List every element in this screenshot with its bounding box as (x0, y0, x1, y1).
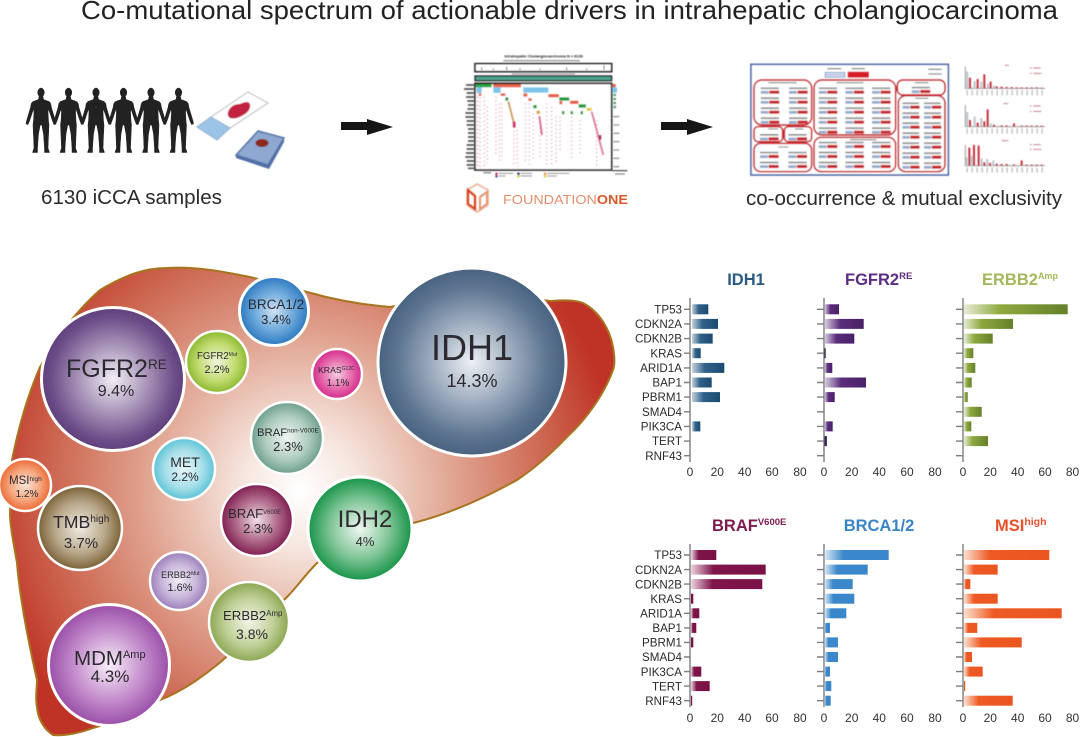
icon: row of people (26, 88, 194, 152)
bubble: MET (153, 438, 215, 500)
gene labels: PIK3CA (641, 666, 682, 679)
bubble: TMB high: 3.7% (64, 535, 98, 552)
tick labels: 40 (1011, 465, 1025, 479)
axis (956, 544, 963, 707)
arrow: sequencing to analysis (661, 119, 713, 135)
bubble: ERBB2 Amp: ERBB2 (223, 608, 266, 623)
mini chart 1 (965, 65, 1045, 93)
bubble: MSI high: MSI (9, 475, 29, 487)
gene labels: SMAD4 (642, 651, 683, 664)
oncoprint matrix (464, 83, 627, 177)
mini chart 3 (965, 141, 1045, 170)
bubble: ERBB2 Amp: 3.8% (236, 626, 268, 642)
bubble: KRAS (312, 349, 362, 399)
chart title: IDH1 (727, 271, 765, 289)
chart: BRCA1/2 co-mutations (817, 517, 942, 725)
bars (824, 304, 866, 446)
bubble: BRCA1/2: BRCA1/2 (248, 297, 304, 312)
axis (684, 298, 690, 462)
tick labels: 0 (821, 465, 828, 479)
tick labels: 20 (711, 711, 724, 725)
tick labels (821, 711, 942, 725)
bubble: MET: MET (170, 454, 200, 470)
bubble: IDH2: 4% (356, 534, 375, 549)
label: samples: 6130 iCCA samples (41, 187, 222, 209)
bubble: FGFR2 RE: RE (148, 357, 167, 372)
gene labels: KRAS (650, 593, 682, 606)
gene labels: TERT (652, 435, 682, 448)
chart: ERBB2 Amp co-mutations (956, 271, 1079, 479)
panel: mini bar charts (965, 65, 1045, 170)
panel: co-occurrence matrix (751, 64, 948, 175)
icon: tissue slide (197, 92, 268, 140)
tick labels: 40 (873, 711, 886, 725)
tick labels (960, 711, 1079, 725)
axis (817, 544, 824, 707)
bubble: MET: 2.2% (171, 470, 199, 484)
bars (824, 550, 889, 706)
gene labels: PIK3CA (641, 420, 682, 434)
tick labels: 60 (900, 711, 914, 725)
tick labels: 60 (900, 465, 914, 479)
panel: samples (26, 88, 284, 209)
gene labels: BAP1 (652, 622, 682, 635)
bubble: BRAF V600E: 2.3% (243, 521, 273, 536)
bubble: IDH2 (308, 477, 412, 581)
tick labels (687, 711, 807, 725)
chart title: ERBB2 (982, 271, 1038, 289)
bubble: MDM Amp (48, 604, 170, 726)
gene labels: TP53 (654, 549, 682, 562)
bubble: IDH1: 14.3% (446, 371, 498, 391)
tick labels (960, 465, 1079, 479)
bars (964, 304, 1068, 446)
panel: liver bubble map (0, 268, 614, 735)
bubble: ERBB2 Mut (150, 552, 208, 610)
tick labels: 0 (960, 711, 967, 725)
bubble: FGFR2 Mut: Mut (229, 352, 238, 358)
bubble: IDH2: IDH2 (338, 506, 392, 533)
arrow: samples to sequencing (341, 119, 393, 135)
gene labels: TERT (652, 680, 682, 693)
mini chart 2 (965, 104, 1045, 131)
bubble: IDH1: IDH1 (431, 327, 513, 368)
chart title: BRAF (712, 517, 758, 535)
bubble: BRAF non-V600E: non-V600E (287, 428, 319, 434)
bubble: BRAF non-V600E: BRAF (257, 427, 287, 439)
chart: IDH1 co-mutations (635, 271, 807, 479)
bubble: ERBB2 Mut: 1.6% (167, 582, 193, 594)
bubble: MSI high: high (29, 476, 42, 483)
tick labels: 0 (687, 711, 694, 725)
chart title: BRCA1/2 (844, 517, 914, 535)
logo: FoundationOne (467, 184, 628, 212)
tick labels: 80 (793, 711, 807, 725)
bubble: BRAF V600E (221, 484, 293, 556)
gene labels: PBRM1 (642, 391, 682, 404)
gene labels: PBRM1 (642, 637, 682, 650)
axis (817, 298, 824, 462)
gene labels: SMAD4 (642, 406, 683, 419)
bubble: FGFR2 RE: FGFR2 (66, 355, 148, 383)
bubble: FGFR2 Mut: FGFR2 (197, 351, 229, 362)
chart title: MSI (995, 517, 1024, 535)
bubble: BRAF non-V600E: 2.3% (273, 439, 303, 454)
gene labels: ARID1A (640, 608, 682, 620)
gene labels: KRAS (650, 347, 682, 360)
icon: tissue cassette (236, 131, 284, 169)
axis (684, 544, 690, 707)
tick labels: 80 (928, 711, 942, 725)
gene labels: CDKN2B (635, 333, 682, 346)
chart title: high (1024, 516, 1047, 528)
tick labels: 0 (687, 465, 694, 479)
bubble: KRAS: KRAS (318, 365, 342, 375)
tick labels: 60 (1038, 711, 1052, 725)
bubble: FGFR2 RE (42, 308, 184, 450)
bubble: TMB high: TMB (53, 512, 90, 532)
tick labels: 60 (1038, 465, 1052, 479)
wordmark: FOUNDATION ONE (503, 192, 628, 207)
tick labels: 60 (765, 711, 779, 725)
gene labels: RNF43 (645, 695, 682, 708)
gene labels (635, 304, 683, 463)
bubble: KRAS: G12C (342, 366, 355, 372)
bubble: MDM Amp: Amp (123, 649, 146, 661)
liver shape (10, 268, 614, 735)
panel: oncoprint (464, 53, 627, 177)
tick labels: 20 (845, 465, 859, 479)
gene labels (635, 549, 683, 708)
tick labels: 40 (1011, 711, 1025, 725)
chart: BRAF V600E co-mutations (635, 517, 807, 725)
bubble: MDM Amp: 4.3% (91, 667, 129, 686)
tick labels: 20 (845, 711, 859, 725)
oncoprint top track (475, 61, 612, 81)
bubble: BRAF V600E: BRAF (228, 506, 263, 521)
tick labels: 20 (984, 465, 997, 479)
tick labels: 80 (1066, 711, 1079, 725)
bubble: ERBB2 Mut: ERBB2 (161, 570, 191, 580)
tick labels: 80 (793, 465, 807, 479)
tick labels: 0 (960, 465, 967, 479)
bars (964, 550, 1062, 706)
gene labels: BAP1 (652, 377, 682, 390)
bubble: ERBB2 Amp (209, 582, 289, 662)
bubble: ERBB2 Mut: Mut (191, 571, 200, 577)
gene labels: TP53 (654, 304, 682, 316)
bubble: BRCA1/2: 3.4% (261, 312, 291, 327)
bubble: MSI high (0, 459, 51, 511)
chart title: V600E (758, 517, 786, 528)
gene labels: CDKN2A (635, 564, 682, 577)
tick labels (821, 465, 942, 479)
tick labels: 80 (928, 465, 942, 479)
chart: MSI high co-mutations (956, 516, 1079, 725)
tick labels (687, 465, 807, 479)
bars (692, 304, 724, 431)
bubble: BRAF V600E: V600E (263, 510, 281, 516)
tick labels: 20 (984, 711, 997, 725)
bubble: TMB high (38, 486, 122, 570)
icon: hexagon logo (467, 184, 488, 212)
chart title: FGFR2 (845, 271, 899, 289)
gene labels: ARID1A (640, 362, 682, 375)
tick labels: 20 (711, 465, 724, 479)
gene labels: CDKN2B (635, 578, 682, 591)
label: co-occurrence: co-occurrence & mutual exclusivity (746, 188, 1062, 210)
tick labels: 40 (738, 711, 752, 725)
bars (691, 550, 766, 706)
bubble: BRAF non-V600E (251, 402, 323, 474)
bubble: FGFR2 Mut: 2.2% (204, 364, 230, 376)
tick labels: 60 (765, 465, 779, 479)
bubble: ERBB2 Amp: Amp (266, 609, 283, 618)
bubble: FGFR2 RE: 9.4% (98, 383, 134, 400)
axis (956, 298, 963, 462)
bubble: MSI high: 1.2% (16, 489, 39, 500)
bubble: TMB high: high (90, 514, 109, 525)
gene labels: RNF43 (645, 450, 682, 463)
bubble: KRAS: 1.1% (327, 378, 350, 389)
bubble: IDH1 (378, 268, 566, 456)
gene labels: CDKN2A (635, 318, 682, 331)
tick labels: 0 (821, 711, 828, 725)
tick labels: 40 (873, 465, 886, 479)
bubble: FGFR2 Mut (186, 331, 248, 393)
chart: FGFR2 RE co-mutations (817, 271, 942, 479)
tick labels: 40 (738, 465, 752, 479)
oncoprint heading: Intrahepatic Cholangiocarcinoma N = 6130 (504, 53, 584, 58)
tick labels: 80 (1066, 465, 1079, 479)
chart title: Amp (1038, 271, 1058, 281)
bubble: BRCA1/2 (240, 276, 308, 346)
bubble: MDM Amp: MDM (74, 647, 123, 670)
chart title: RE (899, 271, 912, 282)
